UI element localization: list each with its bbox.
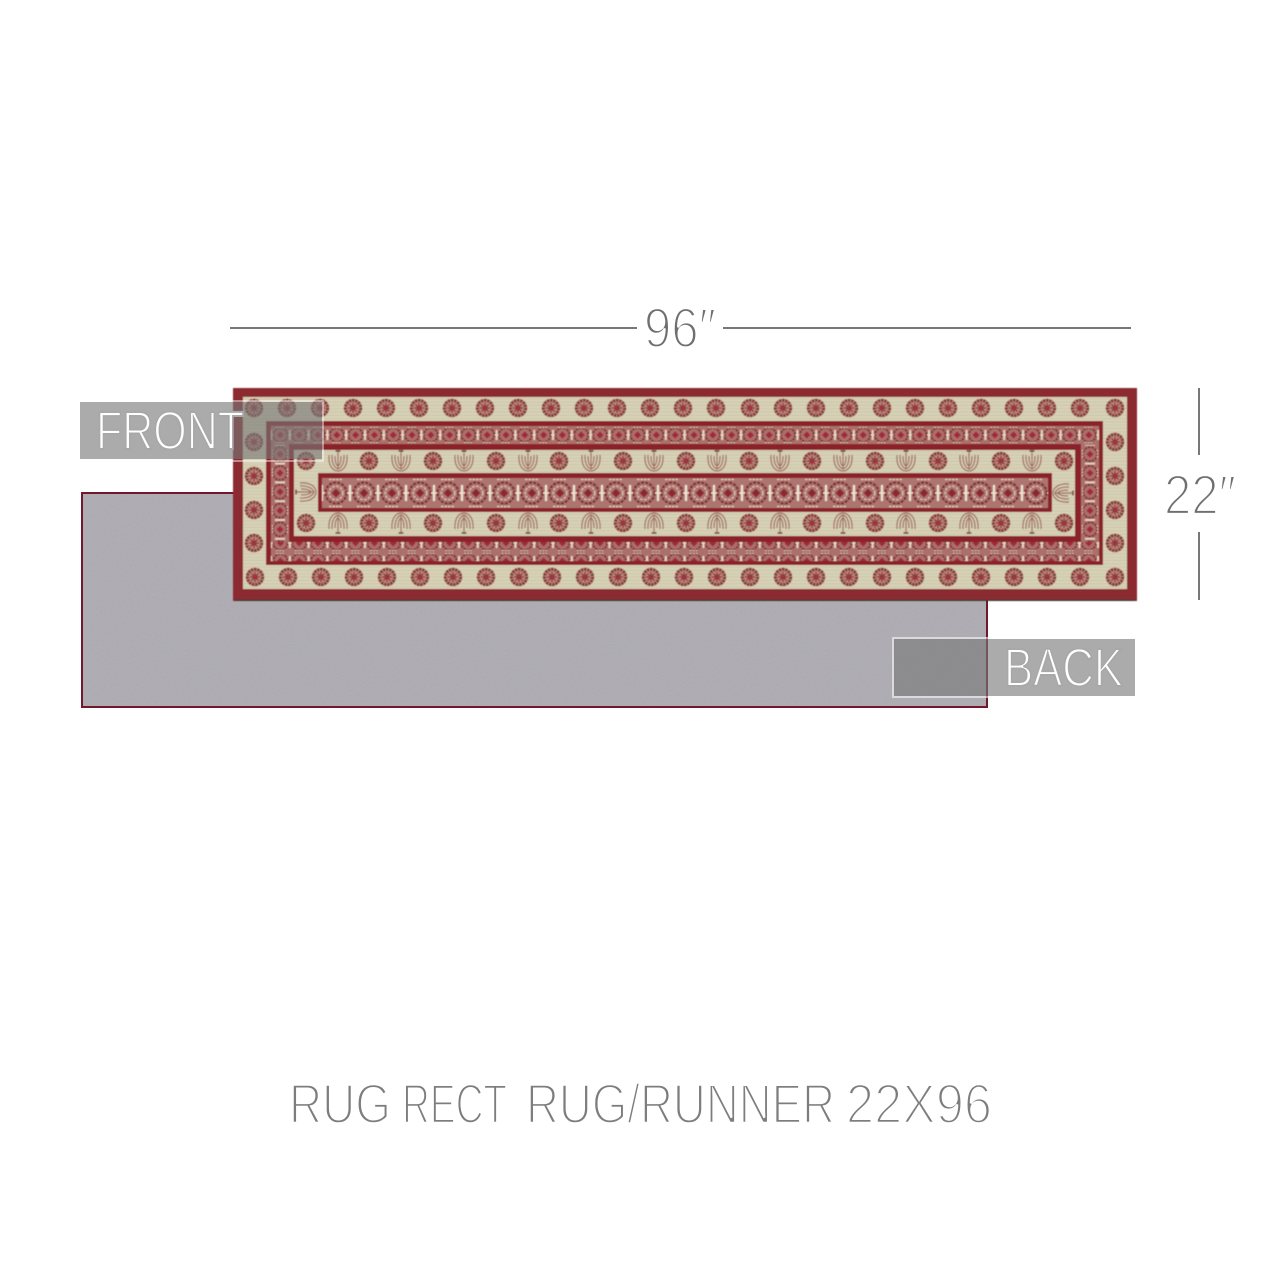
front of rug <box>233 388 1137 601</box>
product title: RECT <box>402 1072 507 1135</box>
product title <box>289 1072 992 1135</box>
back of rug <box>81 492 988 708</box>
product title: RUG <box>289 1072 391 1135</box>
willow tree motifs <box>296 451 1073 533</box>
label: back: BACK <box>1004 638 1123 698</box>
dimension: height 22 inches: 22″ <box>1164 463 1236 526</box>
dimension: width 96 inches: 96″ <box>644 296 716 359</box>
label: back <box>893 638 1136 698</box>
inner medallion rows <box>297 452 1073 532</box>
product title: RUG/RUNNER <box>526 1072 835 1135</box>
product title: 22X96 <box>846 1072 992 1135</box>
label: front: FRONT <box>96 401 244 461</box>
outer medallion border <box>245 399 1124 586</box>
